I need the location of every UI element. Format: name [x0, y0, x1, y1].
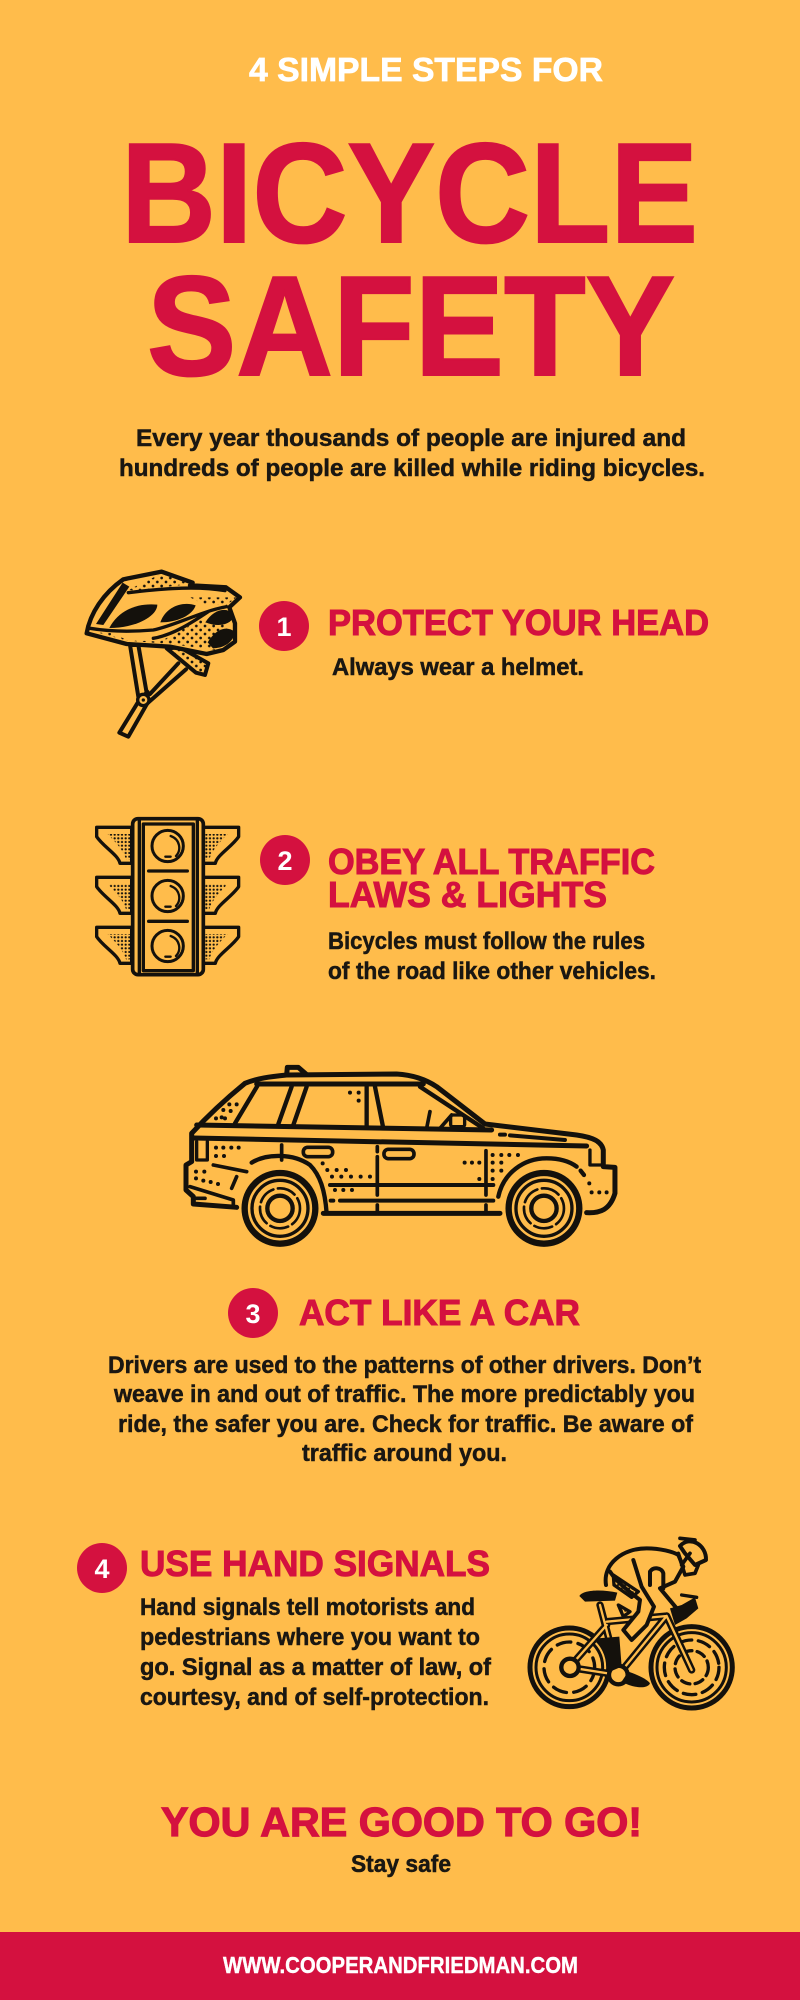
body: step 4: pedestrians where you want to	[140, 1624, 480, 1651]
icon: traffic light	[97, 819, 239, 975]
heading: protect your head: PROTECT YOUR HEAD	[328, 602, 709, 643]
title	[121, 114, 698, 406]
number badge 3	[228, 1288, 278, 1338]
front wheel	[509, 1173, 579, 1244]
footer bar	[0, 1932, 800, 2000]
body: step 2: of the road like other vehicles.	[328, 958, 656, 985]
body: step 2: Bicycles must follow the rules	[328, 928, 645, 955]
intro text	[119, 425, 705, 482]
bicycle frame	[569, 1605, 692, 1675]
step 1	[259, 601, 709, 681]
footer bar: WWW.COOPERANDFRIEDMAN.COM	[223, 1952, 578, 1978]
body: step 2	[328, 928, 656, 985]
number badge 2	[260, 835, 310, 885]
rear wheel	[245, 1173, 315, 1244]
number badge 4: 4	[94, 1554, 110, 1584]
body: step 3	[108, 1352, 701, 1467]
number badge 1	[259, 601, 309, 651]
subtitle: 4 SIMPLE STEPS FOR	[249, 51, 603, 88]
icon: cyclist	[530, 1538, 732, 1708]
number badge 4	[77, 1543, 127, 1593]
body: step 4: courtesy, and of self-protection.	[140, 1684, 489, 1711]
step 2	[260, 835, 656, 985]
body: step 4: go. Signal as a matter of law, of	[140, 1654, 492, 1681]
icon: car	[186, 1067, 615, 1244]
body: step 3: Drivers are used to the patterns of other drivers. Don’t	[108, 1352, 701, 1379]
title line: safety: SAFETY	[147, 247, 675, 406]
body: step 3: traffic around you.	[302, 1440, 507, 1467]
heading: obey all traffic laws and lights: LAWS & LIGHTS	[328, 874, 607, 915]
body: step 3: ride, the safer you are. Check for traffic. Be aware of	[118, 1411, 694, 1438]
heading: obey all traffic laws and lights	[328, 841, 655, 915]
intro text: hundreds of people are killed while riding bicycles.	[119, 455, 705, 482]
number badge 3: 3	[245, 1299, 261, 1329]
rider	[606, 1548, 698, 1640]
title line: bicycle: BICYCLE	[121, 114, 698, 273]
rear bicycle wheel	[530, 1628, 609, 1707]
step 3	[108, 1288, 701, 1467]
intro text: Every year thousands of people are injured and	[136, 425, 686, 452]
body: step 4	[140, 1594, 492, 1711]
heading: act like a car: ACT LIKE A CAR	[299, 1292, 580, 1333]
body: step 3: weave in and out of traffic. The more predictably you	[113, 1381, 695, 1408]
closing heading: YOU ARE GOOD TO GO!	[161, 1799, 642, 1845]
step 4	[77, 1543, 492, 1711]
heading: obey all traffic laws and lights: OBEY ALL TRAFFIC	[328, 841, 655, 882]
number badge 1: 1	[276, 612, 292, 642]
body: step 4: Hand signals tell motorists and	[140, 1594, 475, 1621]
front bicycle wheel	[651, 1627, 732, 1708]
number badge 2: 2	[277, 846, 293, 876]
rider helmet and face	[678, 1538, 706, 1575]
closing subtext: Stay safe	[351, 1851, 451, 1878]
heading: use hand signals: USE HAND SIGNALS	[140, 1543, 490, 1584]
icon: bicycle helmet	[87, 572, 240, 737]
body: step 1: Always wear a helmet.	[332, 654, 584, 681]
